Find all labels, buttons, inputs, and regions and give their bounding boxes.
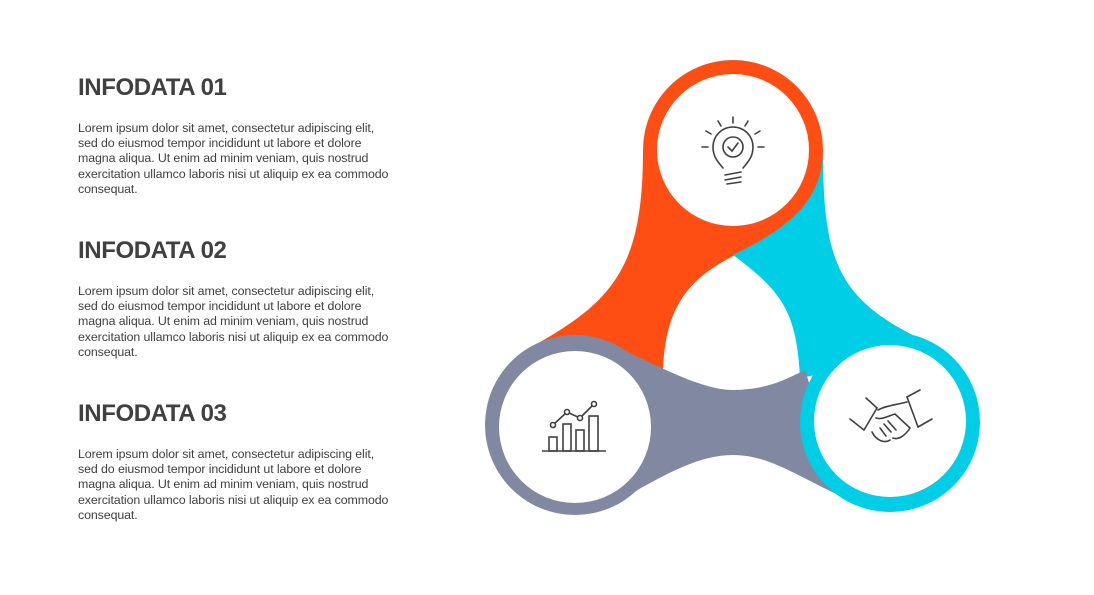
text 03: consequat. xyxy=(78,508,138,522)
icon: handshake xyxy=(850,390,932,442)
title 01: INFODATA 01 xyxy=(78,74,226,101)
text 03 xyxy=(78,447,388,522)
text 01: Lorem ipsum dolor sit amet, consectetur adipiscing elit, xyxy=(78,121,374,135)
text 02: magna aliqua. Ut enim ad minim veniam, quis nostrud xyxy=(78,314,368,328)
text 03: sed do eiusmod tempor incididunt ut labore et dolore xyxy=(78,462,361,476)
text 01: sed do eiusmod tempor incididunt ut labore et dolore xyxy=(78,136,361,150)
orange arm xyxy=(535,150,823,372)
text 03: magna aliqua. Ut enim ad minim veniam, quis nostrud xyxy=(78,477,368,491)
cyan arm xyxy=(733,150,945,378)
title 02: INFODATA 02 xyxy=(78,237,226,264)
text 03: exercitation ullamco laboris nisi ut aliquip ex ea commodo xyxy=(78,493,388,507)
text 03: Lorem ipsum dolor sit amet, consectetur adipiscing elit, xyxy=(78,447,374,461)
text 01: magna aliqua. Ut enim ad minim veniam, quis nostrud xyxy=(78,151,368,165)
text 02 xyxy=(78,284,388,359)
text 01 xyxy=(78,121,388,196)
text 02: sed do eiusmod tempor incididunt ut labore et dolore xyxy=(78,299,361,313)
icon: chart xyxy=(542,402,606,451)
gray circle xyxy=(485,335,665,515)
cyan circle xyxy=(800,332,980,512)
text 01: exercitation ullamco laboris nisi ut aliquip ex ea commodo xyxy=(78,167,388,181)
title 03: INFODATA 03 xyxy=(78,400,226,427)
text 02: exercitation ullamco laboris nisi ut aliquip ex ea commodo xyxy=(78,330,388,344)
icon: lightbulb xyxy=(702,117,764,184)
orange circle xyxy=(643,60,823,240)
gray bridge xyxy=(590,338,845,510)
text 01: consequat. xyxy=(78,182,138,196)
text 02: consequat. xyxy=(78,345,138,359)
text 02: Lorem ipsum dolor sit amet, consectetur adipiscing elit, xyxy=(78,284,374,298)
